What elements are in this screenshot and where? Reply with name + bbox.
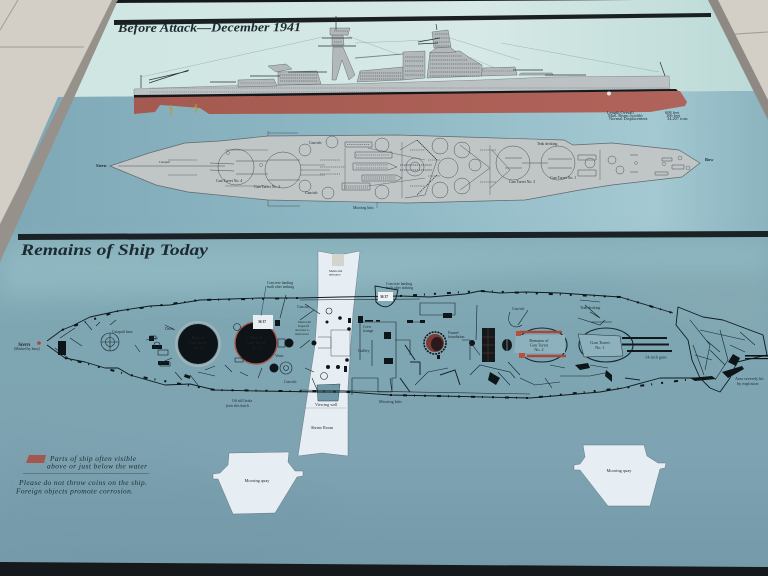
propellers bbox=[169, 104, 198, 115]
title: remains of ship today: Remains of Ship Today bbox=[20, 242, 208, 259]
gun turret no. 3 base: Base of bbox=[250, 335, 263, 340]
wreck text labels: Crew bbox=[363, 325, 371, 329]
viewing well bbox=[317, 384, 340, 401]
wreck text labels: built after sinking bbox=[267, 285, 294, 289]
masts and gun barrels bbox=[141, 16, 665, 88]
deck drawing bbox=[118, 131, 684, 206]
plan view of ship bbox=[110, 131, 700, 206]
black boot stripe bbox=[134, 89, 678, 98]
side elevation of ship bbox=[134, 16, 687, 115]
wreck text labels: Concrete landing bbox=[386, 282, 412, 286]
plan labels: Gun tub bbox=[309, 141, 321, 145]
wreck text labels: foundation bbox=[448, 335, 465, 339]
title: before attack: Before Attack—December 1941 bbox=[117, 20, 301, 35]
heavy broken hull edge bbox=[62, 291, 700, 398]
catapult base: Catapult base bbox=[112, 330, 133, 334]
divider bar bbox=[18, 231, 768, 240]
remains of gun turret no. 2: No. 2 bbox=[534, 347, 544, 352]
plan labels: Gun Turret No. 1 bbox=[550, 176, 576, 180]
legend: red swatch and note: Parts of ship often visible bbox=[49, 454, 137, 463]
gun turret no. 3 base: Gun Turret bbox=[247, 340, 266, 345]
wreck text labels: Funnel bbox=[448, 331, 459, 335]
wreck text labels: main mast bbox=[295, 332, 309, 336]
wreck outline bbox=[47, 286, 768, 398]
plan labels bbox=[159, 141, 576, 195]
small debris icons bbox=[150, 308, 332, 380]
bow wreckage outline bbox=[676, 307, 767, 392]
wreck text labels: Oil still leaks bbox=[232, 399, 253, 403]
legend: red swatch and note: above or just below the water bbox=[47, 462, 147, 470]
wreck text labels: Galley bbox=[358, 348, 371, 353]
labels: stern, bow, mooring bitts: Stern bbox=[96, 163, 107, 168]
specifications text bbox=[607, 110, 688, 122]
wreck text labels: Vents bbox=[275, 354, 284, 358]
wreck text labels: entrance bbox=[329, 272, 341, 276]
anchor bbox=[607, 92, 611, 96]
remains of gun turret no. 2 bbox=[514, 328, 567, 362]
stern label with buoy: (Marked by buoy) bbox=[14, 347, 41, 351]
legend divider bbox=[23, 472, 149, 474]
wreck text labels: Memorial bbox=[298, 320, 311, 324]
wreck text labels: Teak decking bbox=[580, 306, 600, 310]
gun turret no. 1 with guns bbox=[578, 328, 672, 362]
header rule top bbox=[114, 13, 711, 25]
legend: red swatch and note bbox=[26, 454, 147, 470]
sky band behind ship bbox=[72, 0, 755, 97]
wreck text labels: lounge bbox=[363, 329, 374, 333]
coin notice bbox=[15, 478, 147, 496]
wreck text labels: Gun tub bbox=[297, 305, 309, 309]
upper water band bbox=[0, 91, 768, 240]
lower water band bbox=[0, 232, 768, 570]
plan labels: Teak decking bbox=[537, 142, 557, 146]
superstructure bbox=[238, 28, 553, 87]
top edge bar bbox=[116, 0, 640, 3]
wreck text labels: from this hatch bbox=[226, 404, 249, 408]
funnel foundation bbox=[424, 332, 446, 354]
glare on lower panel bbox=[0, 244, 768, 560]
gun turret no. 1 with guns: Gun Turret bbox=[590, 340, 610, 345]
dark deck block bbox=[482, 328, 512, 362]
wreck text labels: Memorial bbox=[329, 269, 342, 273]
mooring quay right bbox=[574, 445, 666, 506]
gun turret no. 4 base bbox=[176, 322, 220, 366]
white marker near turret 3: 36 37 bbox=[258, 320, 266, 324]
wreck text labels: Davit bbox=[165, 327, 174, 331]
labels: stern, bow, mooring bitts bbox=[96, 157, 714, 210]
debris and hull marks bbox=[58, 313, 768, 385]
specifications text: Normal Displacement bbox=[609, 116, 648, 121]
hull grey upper bbox=[134, 76, 670, 96]
specifications text: Length Overall bbox=[607, 110, 634, 115]
concrete landing marker: 36 37 bbox=[380, 295, 388, 299]
bottom edge bar bbox=[0, 562, 768, 576]
mooring quay left: Mooring quay bbox=[244, 478, 270, 483]
plan labels: Gun tub bbox=[305, 191, 317, 195]
catapult base bbox=[101, 330, 133, 351]
gun turret no. 3 base bbox=[235, 322, 277, 364]
remains of gun turret no. 2: Gun Turret bbox=[530, 342, 549, 348]
concrete landing pad bbox=[375, 286, 398, 307]
mooring quay left bbox=[213, 452, 303, 514]
stern label with buoy: Stern bbox=[18, 342, 30, 348]
hull red lower bbox=[134, 91, 687, 114]
wreck text labels: Gun tub bbox=[512, 307, 524, 311]
mooring quay right: Mooring quay bbox=[606, 468, 632, 473]
labels: stern, bow, mooring bitts: Bow bbox=[705, 157, 714, 162]
wreck text labels: Viewing well bbox=[315, 402, 338, 407]
plan labels: Gun Turret No. 2 bbox=[509, 180, 535, 184]
plan labels: Catapult bbox=[159, 160, 170, 164]
wreck text labels: Shrine Room bbox=[311, 425, 334, 430]
concrete landing marker bbox=[378, 292, 393, 301]
dense deck hatching bbox=[320, 140, 496, 195]
wreck text labels: built after sinking bbox=[386, 286, 413, 290]
remains of gun turret no. 2: Remains of bbox=[529, 338, 549, 343]
stern label with buoy bbox=[14, 341, 41, 351]
gun turret no. 1 with guns: No. 1 bbox=[595, 345, 605, 350]
wreck text labels: attached to bbox=[295, 328, 310, 332]
gun turret no. 4 base: Gun Turret bbox=[189, 340, 208, 345]
structural hatching bbox=[150, 31, 668, 92]
coin notice: Please do not throw coins on the ship. bbox=[18, 478, 147, 487]
wreck text labels bbox=[165, 269, 764, 430]
labels: stern, bow, mooring bitts: Mooring bitts bbox=[353, 206, 374, 210]
wreck text labels: flagstaff bbox=[298, 324, 310, 328]
coin notice: Foreign objects promote corrosion. bbox=[15, 486, 133, 496]
metal frame bbox=[0, 0, 768, 262]
specifications text: 106 feet bbox=[666, 113, 681, 118]
plan labels: Gun Turret No. 4 bbox=[216, 179, 242, 183]
wreck text labels: 14-inch guns bbox=[645, 354, 667, 360]
wreck text labels: Mooring bitts bbox=[379, 399, 402, 404]
specifications text: Max. Beam (width) bbox=[608, 113, 643, 118]
rigging lines bbox=[141, 35, 659, 77]
wreck text labels: Gun tub bbox=[284, 380, 296, 384]
wreck text labels: Concrete landing bbox=[267, 281, 293, 285]
gun turret no. 4 base: Base of bbox=[192, 335, 205, 340]
gun turret no. 3 base: No. 3 bbox=[252, 345, 260, 350]
specifications text: 608 feet bbox=[665, 110, 680, 115]
wreck text labels: Area severely hit bbox=[735, 376, 764, 381]
gun turret no. 4 base: No. 4 bbox=[194, 345, 202, 350]
wreck text labels: by explosion bbox=[737, 381, 759, 386]
white marker near turret 3 bbox=[253, 315, 273, 329]
plan labels: Gun Turret No. 3 bbox=[254, 185, 280, 189]
specifications text: 34,207 tons bbox=[667, 116, 688, 122]
white walkway: memorial and shrine room bbox=[298, 251, 360, 456]
